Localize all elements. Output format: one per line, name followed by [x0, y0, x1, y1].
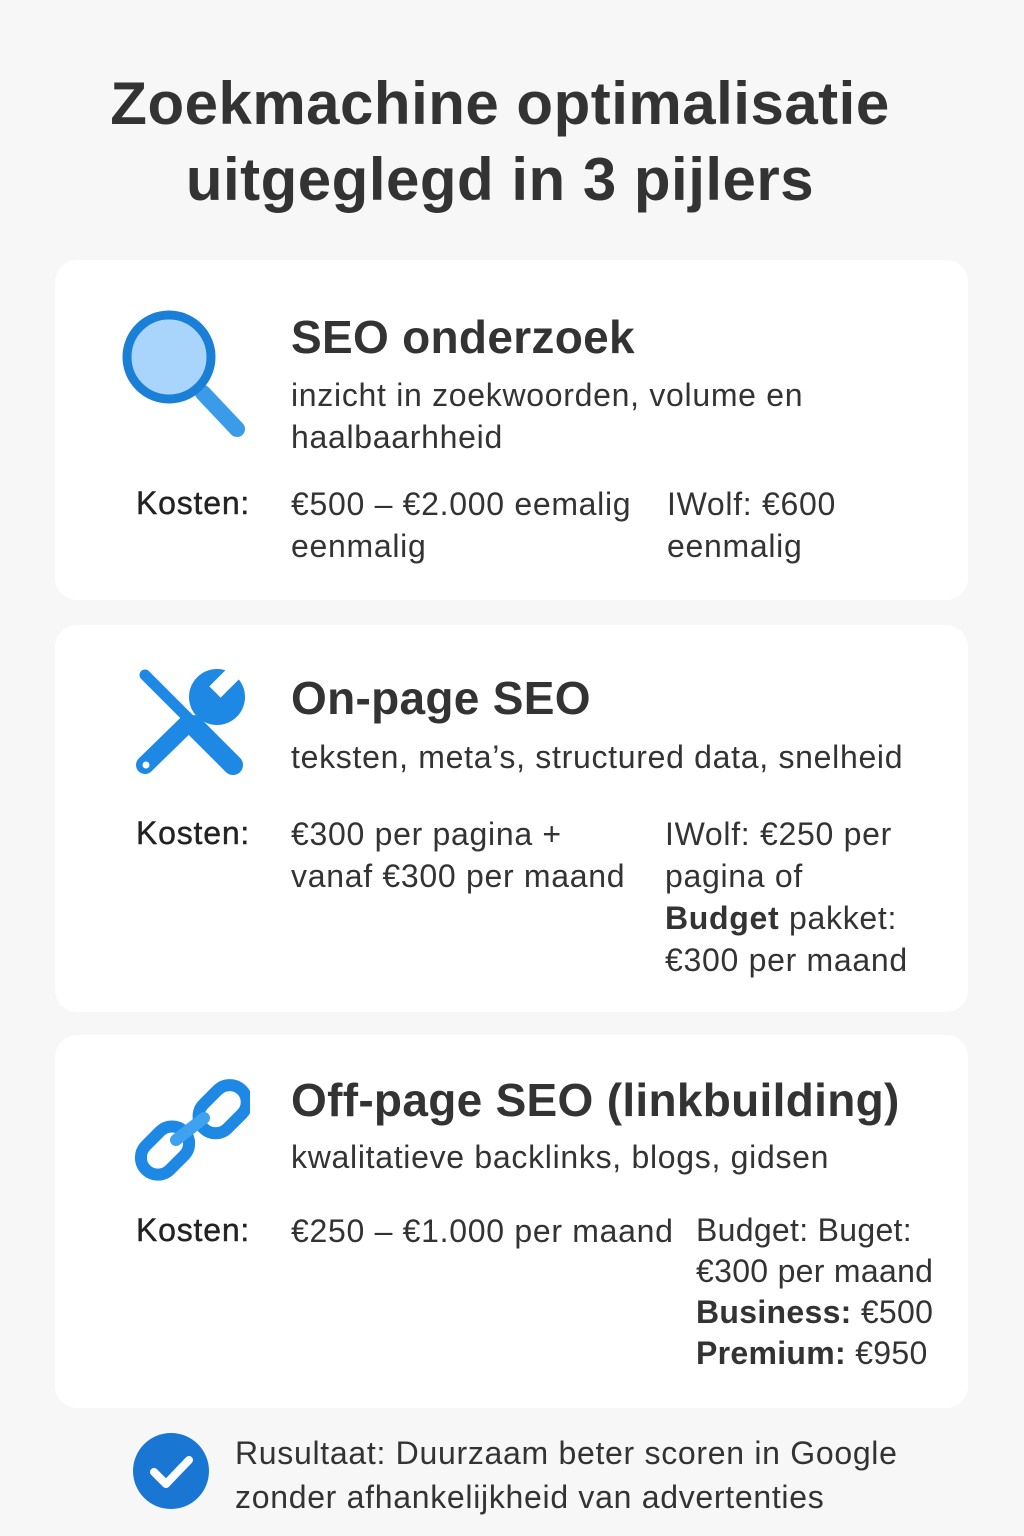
- text: packages: Business: €500: [696, 1294, 933, 1330]
- heading: On-page SEO: On-page SEO: [291, 672, 591, 724]
- icon: magnifier: [122, 310, 245, 437]
- text: result: zonder afhankelijkheid van advertenties: [235, 1479, 824, 1515]
- text: IWolf 2: IWolf: €250 per: [665, 816, 892, 852]
- title: uitgeglegd in 3 pijlers: [186, 146, 814, 213]
- text: IWolf 2: Budget pakket:: [665, 900, 897, 936]
- text: packages: [696, 1212, 933, 1371]
- icon: tools: [136, 669, 245, 775]
- text: packages: Budget: Buget:: [696, 1212, 912, 1248]
- label: kosten 3: Kosten:: [136, 1212, 250, 1248]
- icon: checkmark: [133, 1433, 209, 1509]
- icon: chain link: [134, 1079, 250, 1181]
- text: cost 1: €500 – €2.000 eemalig: [291, 486, 631, 522]
- text: result: [235, 1435, 898, 1515]
- text: cost 2: vanaf €300 per maand: [291, 858, 625, 894]
- panel: SEO onderzoek: [55, 260, 968, 600]
- text: cost 3: €250 – €1.000 per maand: [291, 1213, 674, 1249]
- text: result: Rusultaat: Duurzaam beter scoren in Google: [235, 1435, 898, 1471]
- text: cost 2: €300 per pagina +: [291, 816, 562, 852]
- text: description 3: kwalitatieve backlinks, blogs, gidsen: [291, 1139, 829, 1175]
- text: IWolf 2: pagina of: [665, 858, 803, 894]
- panel: Off-page SEO: [55, 1035, 968, 1408]
- text: description 1: haalbaarhheid: [291, 419, 503, 455]
- text: IWolf 1: eenmalig: [667, 528, 802, 564]
- text: packages: Premium: €950: [696, 1335, 928, 1371]
- heading: SEO onderzoek: SEO onderzoek: [291, 311, 635, 363]
- title: Zoekmachine optimalisatie: [110, 70, 890, 137]
- title: [110, 70, 890, 213]
- text: cost 2: [291, 816, 625, 894]
- text: IWolf 2: €300 per maand: [665, 942, 908, 978]
- text: description 1: inzicht in zoekwoorden, volume en: [291, 377, 803, 413]
- label: kosten 2: Kosten:: [136, 815, 250, 851]
- text: cost 1: [291, 486, 631, 564]
- heading: Off-page SEO: Off-page SEO (linkbuilding): [291, 1074, 900, 1126]
- text: description 2: teksten, meta’s, structured data, snelheid: [291, 739, 903, 775]
- text: cost 1: eenmalig: [291, 528, 426, 564]
- text: IWolf 1: IWolf: €600: [667, 486, 836, 522]
- panel: On-page SEO: [55, 625, 968, 1012]
- label: kosten 1: Kosten:: [136, 485, 250, 521]
- text: IWolf 2: [665, 816, 908, 978]
- text: description 1: [291, 377, 803, 455]
- text: IWolf 1: [667, 486, 836, 564]
- text: packages: €300 per maand: [696, 1253, 933, 1289]
